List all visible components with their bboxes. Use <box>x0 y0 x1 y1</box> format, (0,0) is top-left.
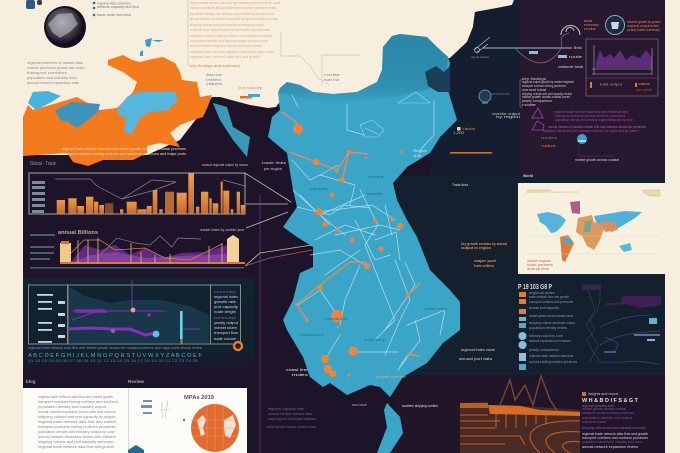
right text: regional index <box>214 295 238 299</box>
graticule <box>526 236 660 254</box>
chart 2 heading: annual Billions <box>58 230 98 236</box>
icon: blue car badge <box>577 134 615 156</box>
data strip under dashboard: regional trade network data flow and market growth across the coastal provinces and major ports annual review <box>28 345 202 350</box>
light blue region: left <box>28 91 61 110</box>
text and orange line near right coast <box>450 127 492 154</box>
text under car badge: value <box>541 144 556 148</box>
text: centre list: transport corridors linking provinces <box>522 84 566 88</box>
panel: upper right purple <box>520 0 665 176</box>
legend list at top: regional data summary <box>97 2 131 6</box>
article text: transport corridors linking northern and southern <box>38 400 118 404</box>
left dashboard title: Global - Trade <box>30 161 56 167</box>
text: centre list: by region <box>496 115 520 119</box>
panel: world map <box>518 183 665 274</box>
chart: orange layered landscape <box>460 376 580 453</box>
legend list at top: trade route overview <box>97 13 131 17</box>
text left of map: per region <box>264 167 282 171</box>
text block: top column: shipping volume and port capacity summary by region <box>190 22 264 27</box>
article text: population density and industry output <box>38 405 106 409</box>
text block: top column: regional trade network data flow and market growth across the coast <box>190 0 281 5</box>
text under car badge <box>541 136 619 162</box>
text beside badge <box>584 19 662 32</box>
icon: purple recycle triangle <box>532 108 544 130</box>
text: centre list: annual total <box>522 88 546 92</box>
text block: lower-left sea: annual corridor volume data <box>268 412 313 416</box>
panel: stat list: corridors linking northern provinces <box>529 360 577 364</box>
map label text: growth corridor <box>376 375 407 379</box>
text: centre list: regional output growth by market segment <box>522 80 574 84</box>
teal area <box>69 287 209 343</box>
continents <box>537 212 566 233</box>
orange trunk routes <box>282 112 420 356</box>
caption on orange: regional trade network data flow and market growth across the coastal provinces <box>62 146 186 151</box>
text beside badge: yearly trade summary <box>627 28 660 32</box>
text left of map: trade links <box>262 161 286 165</box>
icon: antenna and route at top right: signal station <box>471 55 489 59</box>
labels on blue line: network total <box>558 65 583 69</box>
panel: stat list <box>518 291 577 370</box>
right text: growth rate <box>214 300 236 304</box>
horizontal blue line and curve <box>483 33 572 63</box>
blue region: centre-left <box>55 102 100 128</box>
text block: lower right: population density and output <box>582 416 633 420</box>
text block: lower right: transport corridors and northern provinces <box>582 436 648 440</box>
text block: lower-left sea <box>266 407 316 429</box>
text block: lower right: transport corridors linking provinces <box>582 411 634 415</box>
icon: orange ring <box>234 342 242 350</box>
icon: orange globe <box>191 404 239 452</box>
text block: top column: regional trade network data flow and growth <box>190 54 260 59</box>
panel: stat list: regional trade network data flow <box>529 354 573 358</box>
purple series line <box>69 328 157 335</box>
small labels near coast: values <box>206 82 222 86</box>
article text: annual network expansion shown with markers <box>38 435 116 439</box>
text beside badge: regional output levels <box>627 24 659 28</box>
bar chart bars <box>57 173 245 214</box>
text beside badge: network growth by quarter <box>627 20 662 24</box>
text block: lower right <box>582 392 648 449</box>
map notes: annual flow <box>527 267 550 271</box>
panel: stat list: market growth across coastal zones <box>529 314 573 318</box>
label above world map: World <box>523 174 534 178</box>
orange landmass <box>23 55 212 166</box>
text block: left note <box>27 61 85 85</box>
data strip under dashboard: A B C D E F G H I J K L M N O P Q R S T U V W X Y Z A B C D E F <box>28 353 202 359</box>
data strip under dashboard: 01 02 03 04 05 06 07 08 09 10 11 12 13 14 15 16 17 18 19 20 21 22 23 24 25 <box>28 359 198 363</box>
labels around south coast <box>286 368 439 408</box>
text block: lower-left sea: market growth across coastal zones <box>266 425 316 429</box>
text: centre list: key findings <box>522 77 546 81</box>
text block: lower right: W H & B D I F S & G T <box>582 398 638 404</box>
text block: top column: transport corridors linking northern and southern provinces today <box>190 5 276 10</box>
article text: shipping volume and port capacity summary <box>38 440 113 444</box>
text block: top column: shipping volume and port capacity summary by region today <box>190 49 274 54</box>
panel: white article card <box>23 388 247 453</box>
text beside badge: note <box>584 27 596 31</box>
mini chart labels <box>141 400 152 414</box>
panel: stat list: trade network flow and growth <box>529 295 569 299</box>
blue blot icon <box>128 445 144 453</box>
text under car badge: market growth across coastal <box>575 158 619 162</box>
small blue tags <box>604 318 660 353</box>
connector pink line <box>245 250 312 266</box>
stat heading: P 19 103 G8 P <box>518 284 552 291</box>
globe heading: MPAs 2019 <box>184 395 214 401</box>
chart 2 left labels <box>30 234 244 268</box>
chart frame: bar chart <box>29 173 245 214</box>
labels around south coast: index <box>292 373 308 377</box>
panel: stat list: transport corridors and provinces <box>529 300 573 304</box>
text block: left note: transport corridors <box>27 71 67 75</box>
map label text: port city <box>425 307 447 311</box>
small footer labels: blog <box>26 379 36 384</box>
labels on blue line: link <box>574 46 582 50</box>
panel: stat list: annual port capacity <box>529 306 559 310</box>
text: purple paragraph: transport corridors linking northern provinces <box>555 113 625 118</box>
text: purple paragraph <box>543 109 646 133</box>
icon: lightbulb badge <box>479 80 522 107</box>
text block: lower right: population density by industry and zone <box>582 440 642 444</box>
article text: transport corridors linking northern provinces <box>38 425 116 429</box>
small coast icon cluster <box>238 86 262 98</box>
small footer labels: Review <box>128 379 145 384</box>
orange labelled callouts: hub cities <box>474 263 495 268</box>
orange labelled callouts: major port <box>474 258 497 263</box>
text: centre list: corridor output <box>492 112 520 116</box>
orange labelled callouts: key growth corridor by annual <box>461 241 507 246</box>
small labels near coast: index <box>206 78 221 82</box>
text block: lower right: regional summary note <box>582 404 614 408</box>
labels around south coast: coast line <box>286 368 308 372</box>
panel: stat list: shipping volume and trade output <box>529 321 575 325</box>
map label text <box>300 149 447 379</box>
text: centre list: yearly comparison <box>522 99 552 103</box>
icon: gauge <box>561 26 580 35</box>
legend list at top <box>93 2 139 17</box>
article text: annual network expansion shown with hub markers <box>38 410 116 414</box>
panel: stat list: network expansion and markers <box>529 339 571 343</box>
text: right coastal sea: Trade Area <box>452 182 469 187</box>
text block: lower-left sea: shipping port and trade statistics <box>268 417 316 421</box>
article text: regional trade network data flow and market <box>38 420 116 424</box>
panel: purple area chart: value <box>638 82 650 86</box>
purple vertical rule <box>260 195 261 453</box>
text and orange line near right coast: 1,200 <box>453 131 464 135</box>
text: centre list <box>492 77 574 119</box>
text: purple paragraph: regional trade network data flow and market growth <box>554 109 628 114</box>
text: purple paragraph: population density and industry output measured by zone <box>555 117 634 122</box>
chart 2 caption: market share by corridor year <box>200 227 245 232</box>
dotted vertical network chart <box>582 285 600 362</box>
chart axis labels <box>32 181 45 213</box>
text: purple paragraph: annual network expansion shown with hub markers across the provinces <box>548 124 646 129</box>
map label text: capacity <box>310 187 328 191</box>
labels around south coast: sea lane <box>352 403 367 407</box>
right text: yearly output <box>214 321 238 325</box>
panel: stat list: yearly comparison <box>529 348 559 352</box>
text left of map <box>262 161 286 171</box>
circle emblem: dark globe <box>44 6 86 48</box>
southern peninsula <box>377 403 403 453</box>
right text: summary <box>214 290 236 294</box>
text block: top column: population density and industry output measured by each zone <box>190 11 275 16</box>
text block: top column: regional trade network data flow and market growth index <box>190 27 270 32</box>
deeper teal bay at top <box>278 34 448 103</box>
right text: route length <box>214 310 236 314</box>
text block: top column: population density and industry output by each zone <box>190 38 269 43</box>
text: mid lower sea: regional index value <box>461 348 495 352</box>
small coast icon cluster: port capacity <box>238 86 262 90</box>
chart line overlay <box>55 179 245 199</box>
right text <box>214 290 239 341</box>
text block: lower right: shipping volume and port capacity summary <box>582 426 646 430</box>
map label text: network hub <box>325 317 347 321</box>
text: purple paragraph: shipping volume and port capacity summary by region and by quarter <box>543 128 640 133</box>
small labels near coast <box>206 73 340 86</box>
text block: lower right: market growth across coastal <box>582 407 626 411</box>
article text <box>38 395 118 449</box>
orange hub nodes <box>293 124 411 378</box>
panel: stat list: population density review <box>529 326 567 330</box>
right text: market share <box>214 326 237 330</box>
text: centre list: note <box>522 103 536 107</box>
icon: antenna and route at top right <box>471 37 490 59</box>
text block: left note: regional overview of market data <box>27 61 84 65</box>
text block: top column: annual network expansion shown with orange hub markers on map <box>190 16 279 21</box>
chart: purple area and towers <box>60 235 245 264</box>
text block: top column <box>190 0 281 68</box>
orange labelled callouts: output in region <box>461 245 492 250</box>
map label text: trade <box>367 192 383 196</box>
legend list at top: network capacity and flow <box>97 5 139 9</box>
orange labelled callouts <box>461 241 507 268</box>
text block: lower right: annual network expansion review <box>582 445 638 449</box>
panel: purple area chart <box>586 39 658 96</box>
panel: navy right-side sea <box>430 0 520 175</box>
panel: purple area chart: per year <box>636 88 653 92</box>
right text: port capacity <box>214 305 238 309</box>
connector lines from charts to map <box>245 173 312 266</box>
left axis labels <box>37 294 65 343</box>
data strip under dashboard <box>28 345 202 363</box>
article text: regional trade network data flow and market growth <box>38 395 113 399</box>
panel: purple area chart: total output <box>600 82 622 86</box>
right text: forecast <box>214 316 236 320</box>
caption on orange: transport corridors linking northern and southern provinces and major ports <box>62 151 186 156</box>
text: centre list: market growth across coastal zones <box>522 95 570 99</box>
text block: top column: transport corridors linking northern and southern provinces <box>190 33 272 38</box>
text and orange line near right coast: Yantai <box>462 127 475 131</box>
small labels near coast: route <box>324 73 340 77</box>
text block: left note: coastal provinces growth rate index <box>27 66 85 70</box>
purple bar strip <box>582 285 601 290</box>
dark inland sea <box>425 66 450 92</box>
text: mid lower sea <box>459 348 495 361</box>
top-left small icon <box>26 0 42 9</box>
labels around south coast: southern shipping corridor <box>402 404 439 408</box>
map label text: coastal zone <box>300 333 324 337</box>
sketch marks <box>160 400 170 418</box>
labels on blue line <box>529 46 583 69</box>
text: mid lower sea: annual port data <box>459 357 492 361</box>
map label text: route <box>368 175 384 179</box>
map top strip <box>527 190 660 196</box>
map label text: 16 <box>413 154 421 158</box>
text under car badge: index <box>541 136 557 140</box>
centre line emblem on map <box>360 92 430 137</box>
purple band chart <box>606 296 661 308</box>
text: centre list: shipping volume and port capacity review <box>522 92 572 96</box>
small footer labels <box>26 379 145 384</box>
text block: lower right: regional trade network data flow and growth <box>582 432 648 436</box>
text block: left note: annual network expansion note <box>27 81 79 85</box>
map notes: market regions <box>527 259 551 263</box>
text block: lower right: annual total <box>582 420 606 424</box>
text block: lower-left sea: regional capacity note <box>268 407 304 411</box>
text beside badge: summary <box>584 23 599 27</box>
purple trend lines <box>600 315 660 364</box>
bracket connector lines at top <box>188 0 360 85</box>
panel: navy mid-right <box>395 176 665 375</box>
main teal sea and land <box>268 34 460 397</box>
network routes on map <box>292 95 445 370</box>
panel: line dashboard <box>28 280 240 344</box>
panel: lower-right purple band <box>395 375 665 453</box>
text beside badge: data <box>584 19 592 23</box>
blue archipelago above orange <box>140 38 164 56</box>
light blue region: centre <box>118 92 178 134</box>
icon: gauge pointer <box>566 27 574 32</box>
right text: transport flow <box>214 331 239 335</box>
right text: trade volume <box>214 337 236 341</box>
article text: regional trade network data flow and growth <box>38 445 114 449</box>
text block: top column: key findings and summary <box>190 63 240 68</box>
map notes: trade partners <box>527 263 554 267</box>
panel: left dashboard teal band <box>23 277 255 372</box>
article text: population density and industry output by zone <box>38 430 115 434</box>
western island strip <box>213 103 250 157</box>
chart 1 caption: annual regional output by sector <box>202 162 249 167</box>
map notes <box>527 259 554 271</box>
caption on orange <box>62 146 186 156</box>
labels on blue line: route <box>569 55 582 59</box>
text block: lower right: insights and report <box>588 392 619 396</box>
text block: left note: population and industry links <box>27 76 77 80</box>
icon: circular cup badge <box>606 16 624 34</box>
small labels near coast: data note <box>206 73 222 77</box>
panel: stat list: industry output by zone <box>529 334 563 338</box>
text block: top column: annual network expansion shown with hub markers <box>190 43 262 48</box>
article text: shipping volume and port capacity by region <box>38 415 115 419</box>
map label text: industry <box>365 338 385 342</box>
small labels near coast: hub list <box>324 78 340 82</box>
map label text: Region <box>413 149 427 153</box>
panel: stat list: regional index <box>529 291 555 295</box>
